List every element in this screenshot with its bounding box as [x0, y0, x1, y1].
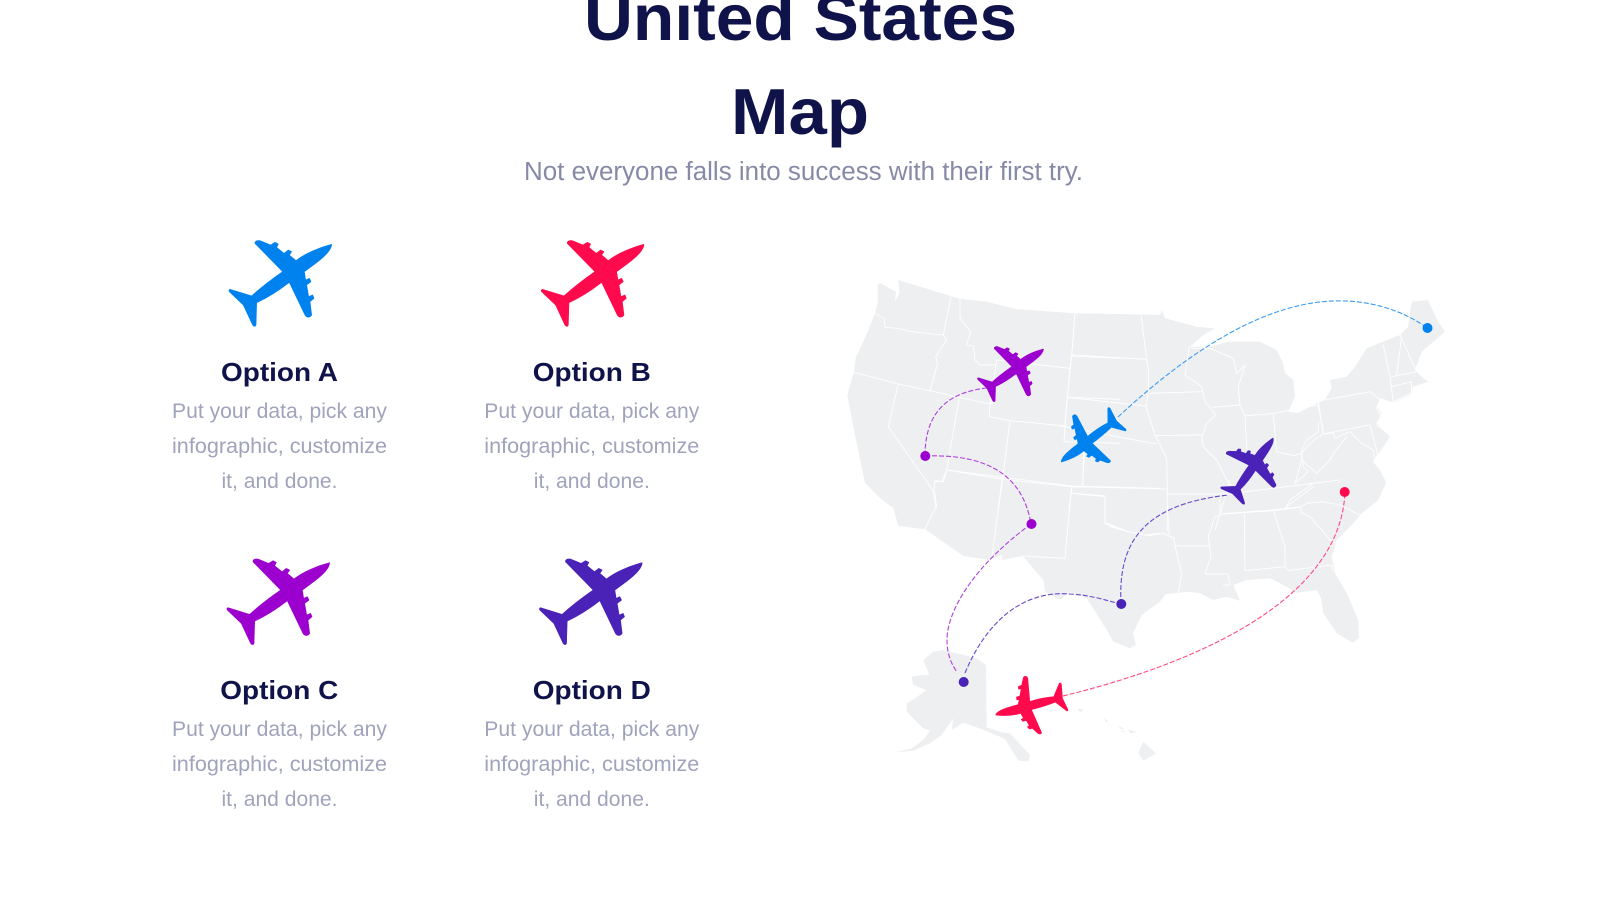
text: option B description: infographic, customize: [484, 435, 699, 458]
route: red, plane to North Carolina: [1063, 492, 1345, 696]
text: option C description: [172, 718, 387, 811]
map plane: indigo: [1210, 436, 1290, 510]
icon: purple plane: [227, 559, 330, 645]
heading: option A: Option A: [221, 357, 338, 387]
route: indigo, Texas to plane: [1121, 495, 1228, 604]
text: option B description: it, and done.: [534, 470, 650, 493]
contiguous states: [847, 280, 1445, 648]
heading: option D: Option D: [533, 675, 651, 705]
heading: option C: Option C: [220, 675, 339, 705]
text: option C description: Put your data, pick any: [172, 718, 387, 741]
dot: New Mexico: [1026, 519, 1036, 529]
text: option A description: Put your data, pick any: [172, 400, 387, 423]
route: purple, New Mexico to Alaska: [947, 524, 1031, 672]
dot: Nevada: [920, 451, 930, 461]
icon: red plane: [541, 241, 644, 326]
text: option D description: Put your data, pick any: [484, 718, 700, 741]
Alaska: [893, 650, 1030, 762]
map: United States: [847, 280, 1445, 762]
dot: North Carolina: [1340, 487, 1350, 497]
icon: indigo plane: [539, 559, 642, 645]
map plane: purple: [978, 347, 1043, 402]
icon: blue plane: [229, 241, 332, 326]
title: [584, 0, 1017, 148]
heading: option B: Option B: [533, 357, 651, 387]
dot: Texas: [1116, 599, 1126, 609]
panel: option D: [484, 559, 700, 811]
Hawaii: [1078, 709, 1156, 761]
text: option D description: it, and done.: [534, 788, 650, 811]
panel: option B: [484, 241, 700, 493]
text: option B description: [484, 400, 700, 493]
route: indigo, Alaska to Texas: [965, 594, 1120, 673]
text: option D description: [484, 718, 700, 811]
subtitle: Not everyone falls into success with their first try.: [524, 158, 1083, 186]
route: blue, plane to Maine: [1118, 301, 1427, 417]
state borders: [854, 297, 1417, 593]
map plane: red: [995, 666, 1076, 740]
text: option C description: it, and done.: [222, 788, 338, 811]
title: Map: [731, 75, 869, 148]
route: purple, Nevada to New Mexico: [925, 456, 1031, 524]
route: purple, plane to Nevada: [925, 388, 987, 456]
map plane: blue: [1059, 407, 1127, 464]
text: option B description: Put your data, pick any: [484, 400, 700, 423]
dot: Maine: [1422, 323, 1432, 333]
panel: option C: [172, 559, 387, 811]
text: option A description: [172, 400, 387, 493]
text: option A description: infographic, customize: [172, 435, 387, 458]
text: option A description: it, and done.: [222, 470, 338, 493]
text: option D description: infographic, customize: [484, 753, 699, 776]
dot: Alaska: [959, 677, 969, 687]
text: option C description: infographic, customize: [172, 753, 387, 776]
panel: option A: [172, 241, 387, 493]
